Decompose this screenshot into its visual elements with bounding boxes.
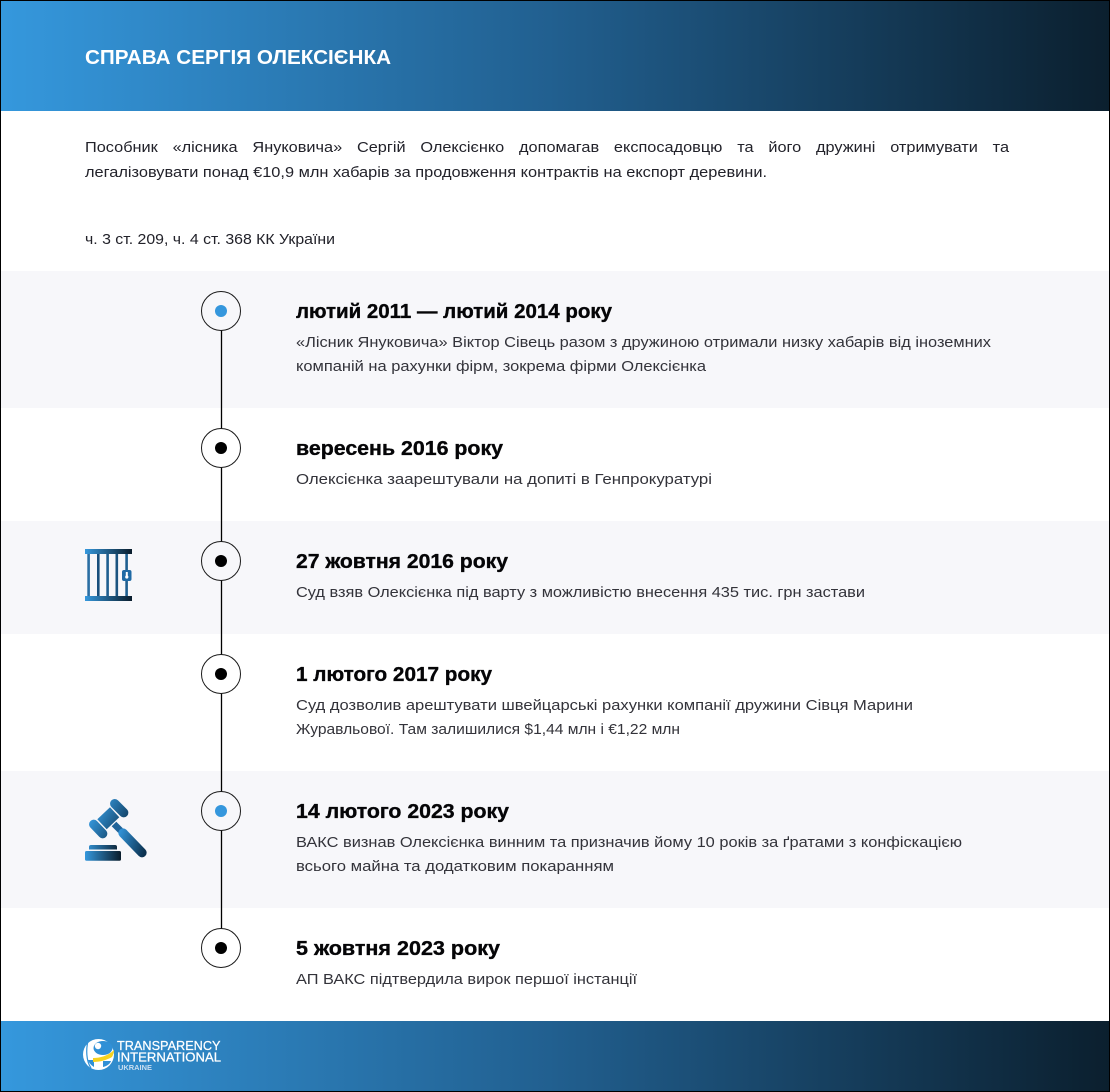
marker 5 <box>202 792 240 830</box>
marker 4 <box>202 654 240 694</box>
event 5: ВАКС визнав Олексієнка винним та призначив йому 10 років за ґратами з конфіскацією <box>296 834 962 851</box>
legal reference: ч. 3 ст. 209, ч. 4 ст. 368 КК України <box>85 231 335 248</box>
header banner <box>0 0 1110 111</box>
logo: Transparency International Ukraine <box>83 1038 221 1072</box>
event 4 <box>296 664 913 738</box>
event 6: 5 жовтня 2023 року <box>296 938 501 960</box>
event 3: Суд взяв Олексієнка під варту з можливістю внесення 435 тис. грн застави <box>296 584 865 601</box>
event 4: 1 лютого 2017 року <box>296 664 493 686</box>
logo: Transparency International Ukraine: TRANSPARENCY <box>117 1038 221 1053</box>
event 2: Олексієнка заарештували на допиті в Генпрокуратурі <box>296 471 712 488</box>
event 4: Журавльової. Там залишилися $1,44 млн і €1,22 млн <box>296 721 680 738</box>
icon: prison bars <box>85 549 132 601</box>
marker 1 <box>202 292 240 330</box>
icon: gavel <box>85 804 142 861</box>
event 6 <box>296 938 638 988</box>
marker 2 <box>202 428 240 468</box>
timeline line <box>220 311 222 948</box>
event 4: Суд дозволив арештувати швейцарські рахунки компанії дружини Сівця Марини <box>296 697 913 714</box>
timeline <box>202 292 240 968</box>
intro first line: Пособник «лісника Януковича» Сергій Олексієнко допомагав експосадовцю та його дружині отримувати та <box>85 139 1009 156</box>
intro second line: легалізовувати понад €10,9 млн хабарів за продовження контрактів на експорт деревини. <box>85 164 767 181</box>
title: СПРАВА СЕРГІЯ ОЛЕКСІЄНКА <box>85 47 391 69</box>
event 3 <box>296 551 865 601</box>
event 1 <box>296 301 992 375</box>
event 2: вересень 2016 року <box>296 438 504 460</box>
logo: Transparency International Ukraine: INTERNATIONAL <box>117 1050 221 1064</box>
event 1: «Лісник Януковича» Віктор Сівець разом з дружиною отримали низку хабарів від іноземних <box>296 334 992 351</box>
event 3: 27 жовтня 2016 року <box>296 551 509 573</box>
event 2 <box>296 438 712 488</box>
marker 3 <box>202 542 240 580</box>
row background bands <box>0 271 1110 908</box>
event 6: АП ВАКС підтвердила вирок першої інстанції <box>296 971 638 988</box>
event 5: 14 лютого 2023 року <box>296 801 510 823</box>
marker 6 <box>202 928 240 968</box>
footer banner <box>0 1021 1110 1092</box>
event 5 <box>296 801 962 875</box>
event 1: лютий 2011 — лютий 2014 року <box>296 301 613 323</box>
event 5: всього майна та додатковим покаранням <box>296 858 614 875</box>
event 1: компаній на рахунки фірм, зокрема фірми Олексієнка <box>296 358 707 375</box>
logo: Transparency International Ukraine: UKRAINE <box>118 1065 152 1072</box>
